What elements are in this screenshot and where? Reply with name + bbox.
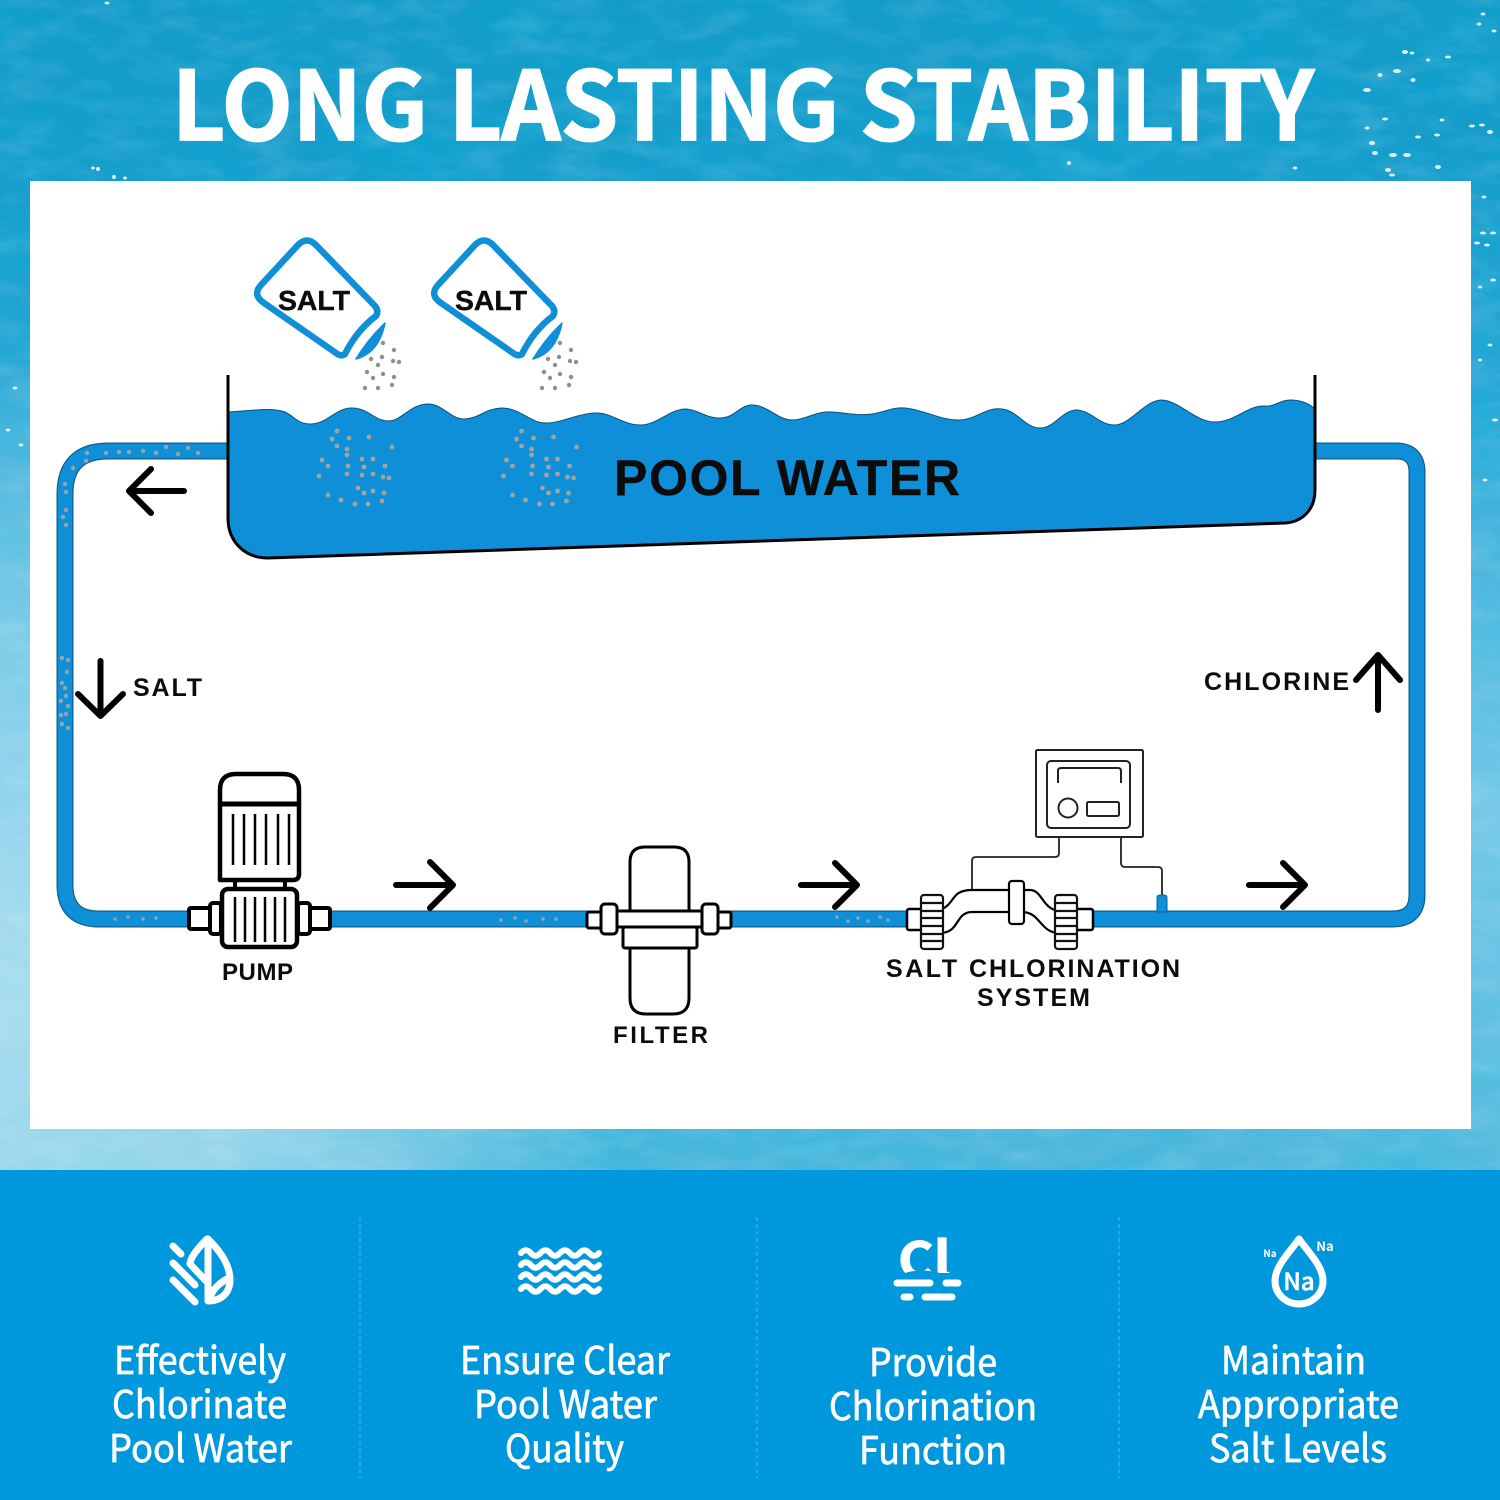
- icon: filter: [587, 847, 731, 1014]
- salt dissolved in pool water, second cluster: [501, 429, 579, 506]
- icon: salt shaker 2: SALT: [455, 285, 527, 316]
- chlorination system label: SYSTEM: [977, 984, 1090, 1012]
- pool water tank: [228, 375, 1315, 558]
- benefit 3: Provide: [869, 1332, 997, 1387]
- icon: chlorine leaf: [173, 1239, 230, 1302]
- title: LONG LASTING STABILITY: [172, 31, 1315, 168]
- icon: waves: [521, 1250, 599, 1292]
- panel: benefits band: [0, 1170, 1500, 1500]
- benefit 3: Function: [859, 1420, 1007, 1475]
- pipe salt particles: [59, 445, 890, 923]
- chlorination system label: [886, 955, 1180, 1012]
- chlorination system label: SALT: [886, 955, 957, 983]
- arrow: down, salt flow: [78, 661, 123, 716]
- arrow: right, after filter: [801, 863, 857, 907]
- benefit 4: Salt Levels: [1209, 1418, 1387, 1473]
- chlorination system label: CHLORINATION: [969, 955, 1180, 983]
- benefit 4: [1198, 1236, 1399, 1473]
- benefit 1: [109, 1239, 292, 1473]
- icon: salt shaker 1: [257, 240, 401, 390]
- benefit 3: Chlorination: [829, 1376, 1037, 1431]
- chlorine flow label: CHLORINE: [1204, 668, 1349, 696]
- benefit 1: Pool Water: [109, 1418, 292, 1473]
- pool water label: POOL WATER: [614, 450, 960, 506]
- icon: salt chlorination system: [907, 750, 1167, 949]
- arrow: right, after pump: [396, 862, 453, 908]
- icon: salt shaker 2: [434, 240, 578, 390]
- icon: sodium drop: Na: [1316, 1236, 1334, 1255]
- icon: sodium drop: [1263, 1236, 1334, 1304]
- filter label: FILTER: [613, 1022, 708, 1049]
- benefit 1: Chlorinate: [112, 1374, 287, 1429]
- icon: pump: [189, 774, 330, 947]
- salt dissolved in pool water: [317, 429, 394, 506]
- diagram: circulation pipe: [65, 451, 1417, 919]
- panel: white diagram panel: [30, 181, 1471, 1129]
- arrow: left, out of pool: [129, 469, 184, 513]
- arrow: right, after chlorinator: [1249, 863, 1305, 907]
- benefit 3: [830, 1237, 1034, 1465]
- arrow: up, chlorine flow: [1356, 655, 1400, 710]
- benefit 4: Maintain: [1221, 1330, 1366, 1385]
- icon: chlorine symbol: Cl: [898, 1221, 951, 1293]
- icon: sodium drop: Na: [1263, 1245, 1277, 1260]
- control box: [1036, 750, 1143, 837]
- benefit 1: Effectively: [114, 1330, 286, 1385]
- benefit 2: [460, 1250, 670, 1473]
- benefit 2: Pool Water: [474, 1374, 657, 1429]
- pump label: PUMP: [222, 959, 293, 986]
- icon: sodium drop: Na: [1283, 1262, 1315, 1297]
- benefit 2: Quality: [505, 1418, 624, 1473]
- salt flow label: SALT: [133, 674, 202, 702]
- benefit 2: Ensure Clear: [460, 1330, 670, 1385]
- icon: salt shaker 1: SALT: [278, 285, 350, 316]
- benefit 4: Appropriate: [1198, 1374, 1399, 1429]
